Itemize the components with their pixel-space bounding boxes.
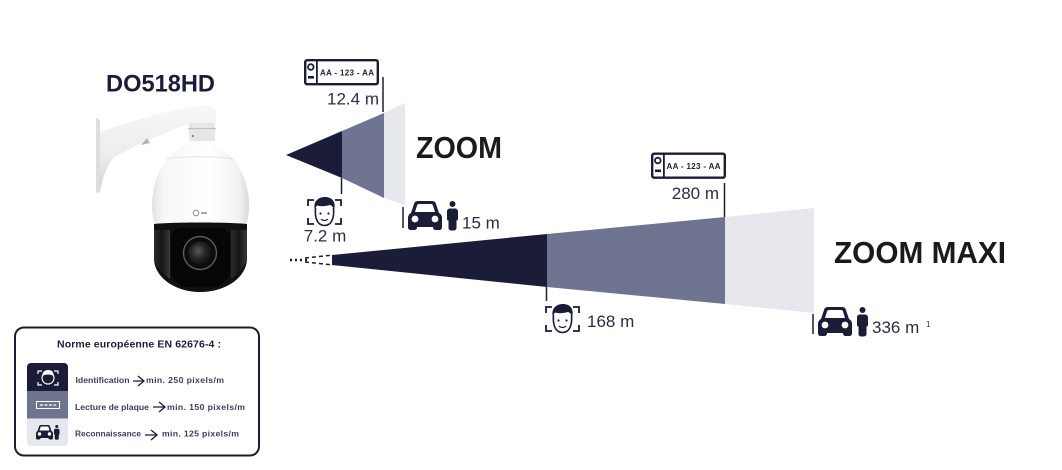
legend row: identification: [76, 375, 224, 385]
legend heading: Norme européenne EN 62676-4 :: [57, 338, 221, 350]
zoom recognition marker: [403, 201, 500, 232]
zoom maxi recognition marker: 1: [926, 320, 931, 329]
zoom recognition marker: 15 m: [462, 214, 500, 232]
legend row: plate reading: min. 150 pixels/m: [167, 402, 245, 412]
legend row: plate reading: Lecture de plaque: [75, 402, 149, 412]
zoom maxi recognition marker: [813, 307, 931, 337]
zoom plate reading marker: AA - 123 - AA: [320, 68, 374, 78]
zoom maxi label: ZOOM MAXI: [834, 235, 1006, 270]
zoom maxi recognition marker: 336 m: [872, 318, 919, 337]
legend row: recognition: min. 125 pixels/m: [162, 428, 239, 438]
zoom cone: [286, 103, 405, 205]
camera illustration: [96, 105, 249, 292]
lens: [184, 236, 216, 270]
zoom identification marker: [304, 178, 346, 246]
white dome: [152, 142, 249, 225]
zoom label: ZOOM: [416, 130, 502, 165]
legend row: recognition: [75, 428, 239, 438]
zoom maxi plate reading marker: AA - 123 - AA: [666, 162, 721, 171]
legend row: recognition: Reconnaissance: [75, 428, 141, 438]
legend row: identification: min. 250 pixels/m: [146, 375, 224, 385]
zoom maxi identification marker: [546, 287, 634, 332]
zoom plate reading marker: [305, 60, 383, 112]
zoom maxi identification marker: 168 m: [587, 312, 634, 331]
zoom maxi cone: [332, 208, 814, 313]
legend panel: [15, 328, 259, 456]
zoom maxi dotted origin: [290, 255, 333, 265]
black lens housing: [154, 222, 247, 292]
zoom plate reading marker: 12.4 m: [327, 90, 379, 108]
legend arrows: [133, 376, 165, 440]
zoom maxi plate reading marker: 280 m: [672, 184, 719, 203]
zoom identification marker: 7.2 m: [304, 226, 346, 246]
product title: DO518HD: [106, 70, 215, 98]
zoom maxi plate reading marker: [652, 154, 725, 217]
legend swatches: [27, 363, 68, 446]
legend row: identification: Identification: [76, 375, 130, 385]
legend row: plate reading: [75, 402, 245, 412]
camera neck: [189, 123, 215, 141]
wall bracket: [96, 118, 100, 193]
